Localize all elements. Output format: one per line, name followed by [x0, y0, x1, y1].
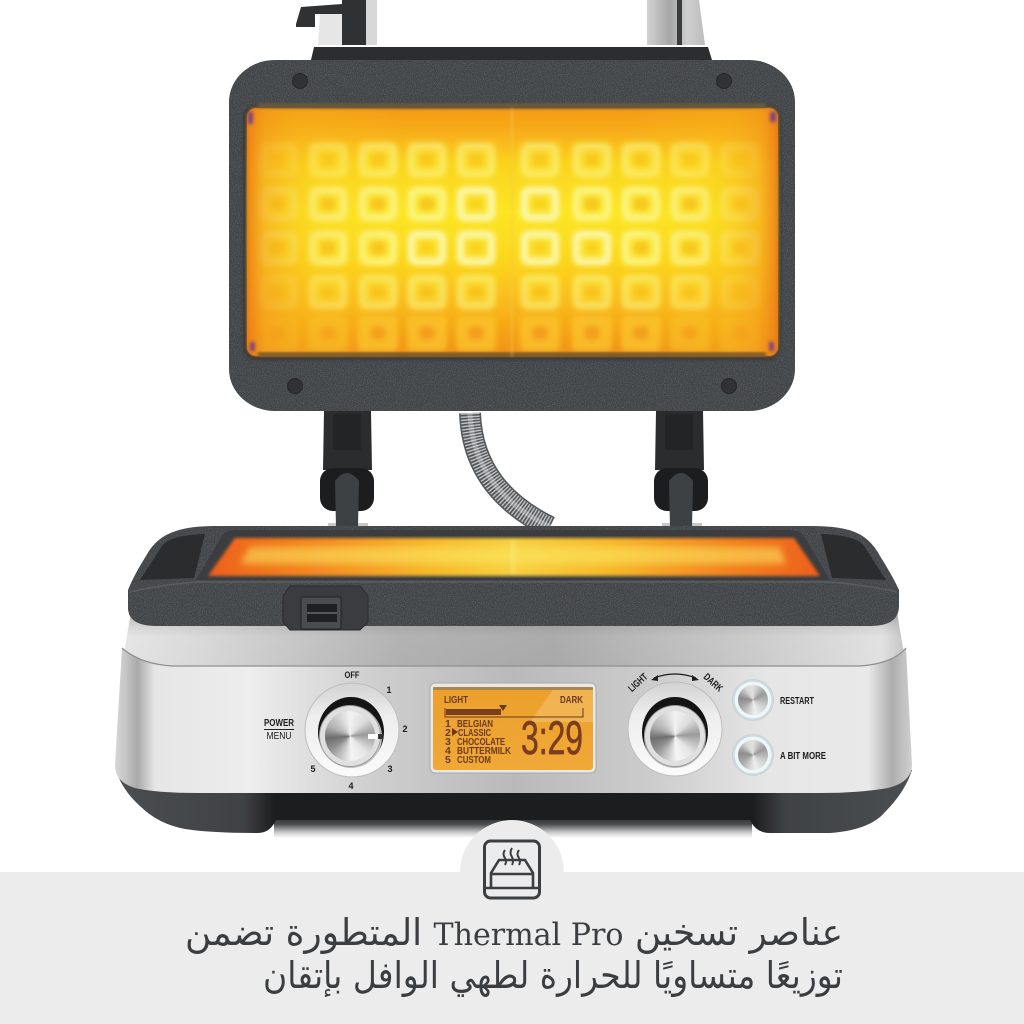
caption text: عناصر تسخين Thermal Pro المتطورة تضمن [185, 911, 843, 954]
front steel panel [115, 648, 912, 793]
upper steel band [123, 612, 905, 670]
right knob recess [628, 682, 722, 776]
LCD display: CLASSIC [458, 727, 491, 739]
plate housing [229, 60, 795, 411]
LCD display: BUTTERMILK [457, 745, 511, 757]
lower cooking plate [128, 526, 899, 630]
control labels: POWER [264, 717, 294, 729]
restart button [733, 680, 773, 720]
LCD display: 1 [445, 718, 451, 730]
right lower hinge [654, 411, 708, 527]
control labels: MENU [266, 730, 292, 742]
latch [283, 586, 368, 630]
waffle grid glow [258, 142, 760, 351]
control labels: DARK [701, 672, 725, 695]
control labels: 5 [310, 764, 316, 774]
LCD display: 5 [445, 754, 451, 766]
power cord hose [470, 413, 550, 527]
LCD display: 2 [445, 727, 451, 739]
rivets [288, 74, 736, 394]
left control knob [325, 711, 375, 761]
left lower hinge [320, 411, 374, 527]
control labels: RESTART [780, 696, 814, 707]
control labels: 3 [387, 764, 393, 774]
knob pointer [368, 734, 383, 739]
upper plate [229, 47, 795, 411]
a bit more button [733, 735, 773, 775]
LCD display: CHOCOLATE [457, 736, 505, 748]
caption text [185, 911, 843, 997]
glowing lower grid [196, 530, 830, 580]
heated window [244, 103, 780, 359]
icon: heating element [484, 841, 540, 898]
control labels: A BIT MORE [780, 751, 826, 762]
LCD display: LIGHT [444, 695, 468, 706]
control labels: 2 [402, 724, 408, 734]
right arm [647, 0, 705, 45]
control labels [264, 670, 826, 791]
control labels: 4 [348, 781, 354, 791]
caption footer band [0, 820, 1024, 1024]
LCD display: 3 [445, 736, 451, 748]
LCD display [430, 683, 596, 773]
chromatic corner fringes [248, 112, 776, 351]
LCD display: DARK [560, 695, 584, 706]
control labels: 1 [386, 685, 392, 695]
appliance body [115, 526, 912, 838]
dark base [116, 770, 912, 833]
left arm [296, 0, 377, 45]
LCD display: 4 [445, 745, 451, 757]
control labels: LIGHT [626, 672, 650, 695]
LCD display: CUSTOM [457, 754, 491, 766]
right control knob [650, 711, 700, 761]
top rail [311, 47, 712, 60]
upper hinge arms [296, 0, 705, 45]
soft top and bottom edges [258, 103, 766, 108]
LCD display: BELGIAN [457, 718, 493, 730]
left knob recess [305, 683, 399, 777]
shadow beneath base [274, 815, 752, 838]
caption text: توزيعًا متساويًا للحرارة لطهي الوافل بإتقان [263, 954, 843, 997]
LCD display: 3:29 [521, 711, 583, 764]
control labels: OFF [344, 670, 360, 680]
